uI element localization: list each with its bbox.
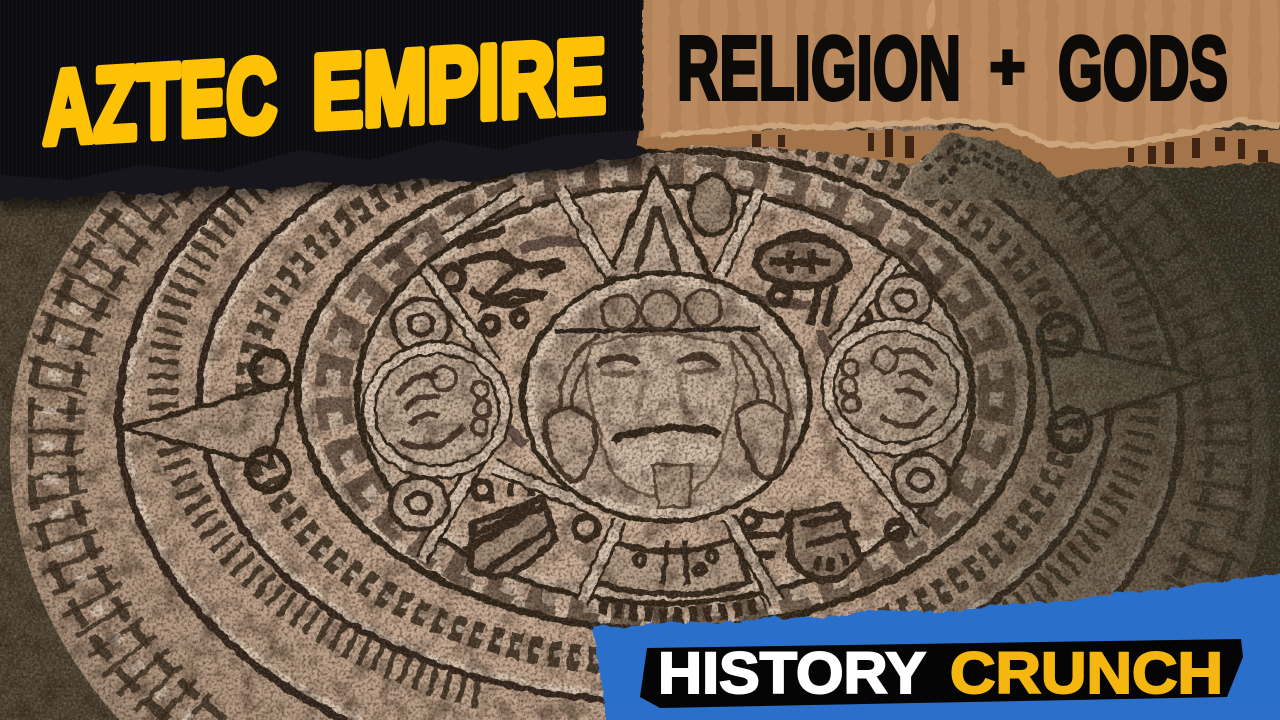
hair lines: [560, 328, 790, 420]
outer ring of day signs: [299, 152, 1031, 628]
top triangle ray: [606, 168, 712, 280]
right jaguar claw circle: [828, 325, 964, 449]
blue sheet: [593, 572, 1280, 716]
blue sheet bottom: [606, 700, 1280, 720]
logo: History Crunch: CRUNCH: [950, 641, 1223, 706]
paper sheet: [0, 0, 644, 202]
subtitle: Religion + Gods: RELIGION: [677, 19, 961, 119]
left ear ornament: [545, 408, 595, 482]
subtitle: Religion + Gods: +: [990, 33, 1025, 102]
mouth: [614, 428, 720, 442]
crevice shadows: [385, 235, 940, 515]
logo banner: [640, 639, 1243, 708]
torn black paper: [0, 0, 650, 212]
dark flutes: [752, 129, 1268, 164]
rays: [122, 168, 1212, 490]
upper right glyph: [756, 234, 870, 326]
right ray: [1040, 340, 1212, 428]
title: Aztec Empire: AZTEC: [43, 37, 277, 167]
diagonal bands: [421, 190, 923, 602]
cardboard tear crease: [927, 0, 936, 30]
right ray scrolls: [1040, 315, 1090, 450]
headband: [555, 290, 760, 331]
lower right glyph: [740, 505, 905, 580]
title: Aztec Empire: EMPIRE: [312, 18, 606, 151]
lower fringe: [600, 603, 765, 616]
tongue: [652, 465, 692, 507]
sun god face: [526, 277, 806, 517]
title: Aztec Empire: [43, 18, 606, 167]
face: [587, 334, 736, 495]
panel glyphs: [441, 230, 905, 616]
top ornament: [690, 175, 734, 235]
small round medallions: [390, 275, 949, 529]
paper shadow: [0, 0, 650, 212]
fuzzy torn strip: [660, 120, 1280, 146]
torn cardboard: [638, 0, 1280, 178]
left jaguar claw circle: [369, 348, 505, 472]
exposed stone peak: [905, 130, 1060, 200]
top right shadow: [920, 0, 1280, 510]
left ray: [122, 382, 292, 466]
middle rings: [120, 50, 1180, 720]
face ring: [526, 277, 806, 517]
nose: [637, 372, 688, 417]
torn blue paper: [593, 572, 1280, 720]
paper face: [0, 0, 642, 180]
right ear ornament: [736, 402, 787, 478]
upper left glyph: [441, 230, 565, 333]
logo: History Crunch: HISTORY: [658, 641, 926, 706]
logo: History Crunch: [658, 641, 1223, 706]
left ray scrolls: [248, 352, 288, 490]
eyes: [597, 356, 720, 366]
bottom panel: [594, 537, 749, 594]
torn edge, exposed corrugation: [638, 130, 1280, 178]
lower left crown glyph: [465, 481, 598, 576]
cardboard face: [643, 0, 1280, 148]
